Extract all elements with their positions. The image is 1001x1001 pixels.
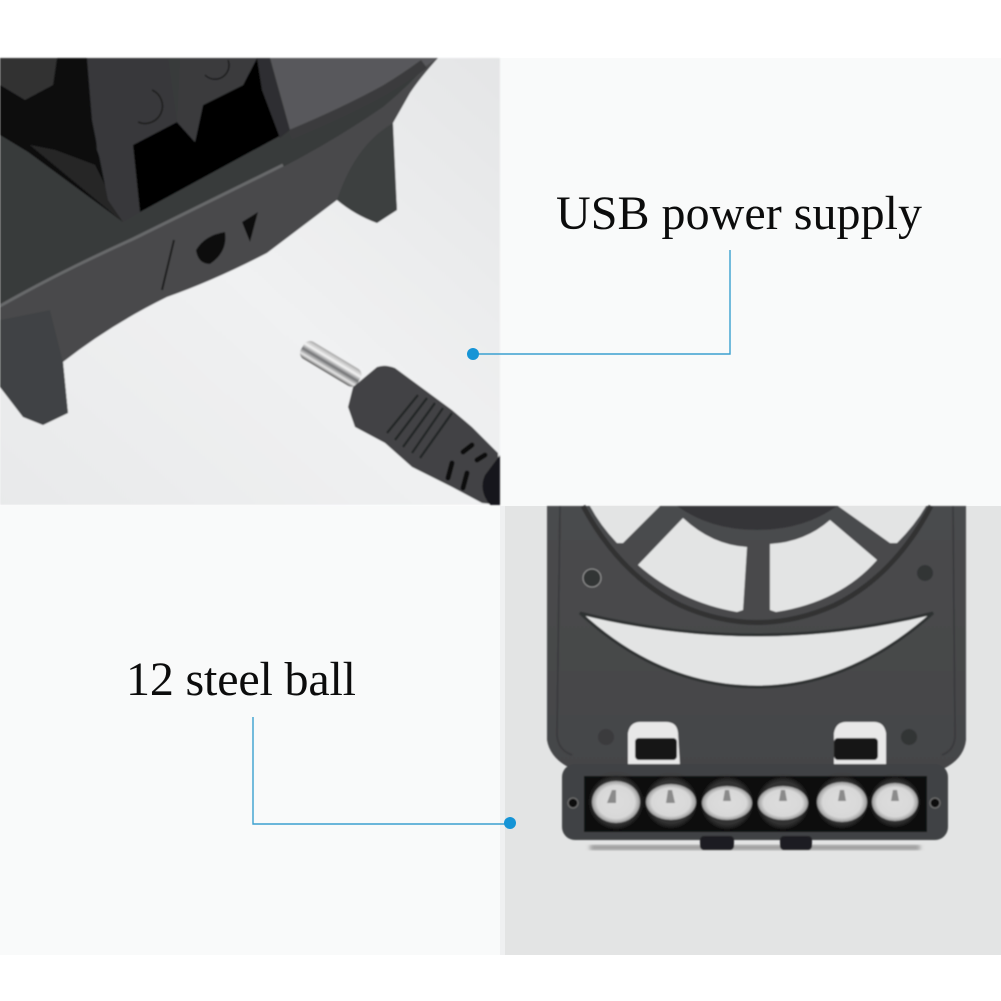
base body [0,58,438,425]
panel: top right background [500,58,1001,506]
hub [677,506,837,530]
leg shading [337,123,397,223]
plug ribs [387,395,452,458]
black void [133,58,287,212]
marker dot: 12 steel ball [504,817,516,829]
plug metal pin [297,338,364,389]
fan window left [638,518,747,612]
socket hole [196,232,225,264]
panel: top left photo of USB port and plug [0,58,500,505]
main housing block [87,58,177,222]
heading: 12 steel ball: 12 steel ball [126,653,356,706]
dark recess left [0,58,123,222]
tray cavity [584,776,927,832]
dark rim band [290,64,424,135]
leader line: USB power supply [473,250,730,354]
left notch [628,722,680,766]
tray screws [568,798,578,808]
steel balls [592,781,640,823]
crescent slot [580,613,933,687]
heading: USB power supply: USB power supply [556,187,922,240]
screw dots [583,569,601,587]
plug slits [448,445,485,488]
right notch [834,722,886,766]
tray [562,764,948,840]
plate [547,506,966,768]
plate inner line [557,506,955,755]
cable [482,455,500,505]
triangle slot [242,212,258,242]
fan ring shadow [583,506,931,622]
socket crack [162,240,174,290]
tray shadow [590,845,920,850]
second block [177,58,257,142]
recess plate [30,145,123,222]
plug body [348,366,500,505]
ball halos [590,776,919,828]
panel: bottom left background [0,506,500,955]
upper surface [0,58,433,307]
fan window far left [590,506,660,543]
panel: bottom right photo of steel ball tray [500,506,1001,955]
callout: USB power supply [467,187,922,360]
ball reflections [607,790,899,803]
fan window right [770,520,877,612]
fan window far right [838,506,926,543]
callout: 12 steel ball [126,653,516,829]
marker dot: USB power supply [467,348,479,360]
small upper block [0,58,57,100]
tray feet [700,836,734,850]
block round mark [138,90,162,123]
third strip [257,58,290,138]
leader line: 12 steel ball [253,717,510,824]
rim highlight [0,165,283,306]
right upper face [270,58,438,132]
